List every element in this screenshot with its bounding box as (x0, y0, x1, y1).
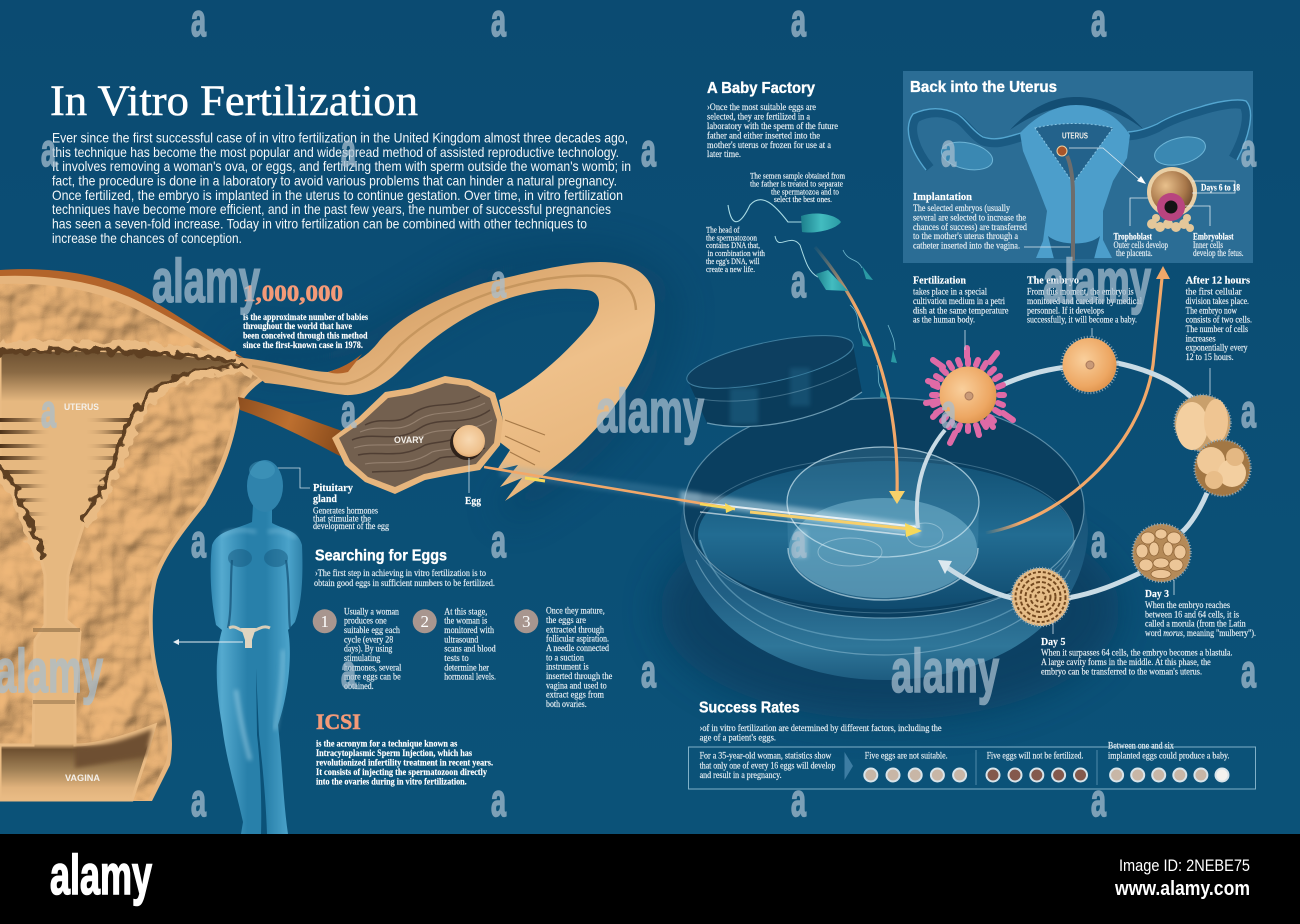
implantation text: The selected embryos (usually (913, 203, 1010, 214)
step 1: produces one (344, 617, 387, 627)
illustration: uterus cross-section (0, 269, 270, 801)
after 12 hours text: division takes place. (1186, 297, 1249, 307)
implantation text: to the mother's uterus through a (913, 232, 1019, 242)
cell development ring (917, 363, 1207, 598)
cell: morula, day 3 (1132, 524, 1190, 582)
egg in ovary (450, 425, 485, 460)
implantation text (913, 191, 1027, 252)
fertilization text (913, 274, 1008, 326)
footer bar: www.alamy.com (1114, 878, 1250, 900)
success rates box: implanted eggs could produce a baby. (1108, 752, 1230, 762)
embryoblast label: Embryoblast (1193, 232, 1234, 242)
watermarks: a (1241, 124, 1256, 176)
step 2: determine her (444, 663, 490, 673)
semen sample note: select the best ones. (774, 195, 832, 204)
cell: two-cell stage (1174, 395, 1230, 451)
implantation text: Implantation (913, 191, 972, 203)
embryo text: The embryo (1027, 274, 1079, 286)
spermatozoon note (706, 226, 766, 274)
embryo text: successfully, it will become a baby. (1027, 315, 1137, 326)
sperm illustrations (728, 200, 897, 398)
intro text: It involves removing a woman's ova, or eggs, and fertilizing them with sperm outside the woman's womb; in (52, 158, 631, 174)
callout: ICSI: It consists of injecting the spermatozoon directly (316, 768, 487, 778)
watermarks: alamy (1043, 247, 1151, 315)
step 2: hormonal levels. (444, 673, 496, 683)
watermarks: alamy (596, 377, 704, 445)
pituitary gland label: gland (313, 493, 337, 505)
step 1: Usually a woman (344, 607, 399, 617)
after 12 hours text: The embryo now (1186, 306, 1237, 316)
watermarks: a (341, 124, 356, 176)
fertilization text: as the human body. (913, 316, 975, 326)
fertilization text: Fertilization (913, 274, 966, 286)
section: success rates: Success Rates (699, 700, 800, 716)
watermarks: a (941, 385, 956, 437)
implanted eggs (1110, 768, 1228, 782)
title: In Vitro Fertilization (50, 78, 418, 125)
callout: 1,000,000: since the first-known case in 1978. (243, 341, 363, 351)
section: searching for eggs: ›The first step in achieving in vitro fertilization is to (315, 568, 486, 579)
step 2: the woman is (444, 617, 488, 627)
after 12 hours text: exponentially every (1186, 344, 1248, 354)
success rates box: that only one of every 16 eggs will develop (700, 760, 836, 771)
trophoblast label: the placenta. (1116, 249, 1152, 259)
cell: fertilization (926, 348, 1013, 443)
success rates box (688, 742, 1256, 789)
fertilization text: cultivation medium in a petri (913, 297, 1005, 307)
intro text: increase the chances of conception. (52, 230, 242, 246)
after 12 hours text: The number of cells (1186, 324, 1248, 335)
day 3 text (1145, 588, 1256, 639)
section: searching for eggs (313, 548, 612, 710)
after 12 hours text (1186, 274, 1252, 363)
callout: 1,000,000: been conceived through this method (243, 332, 368, 342)
dish lid (683, 325, 862, 427)
callout: ICSI (316, 709, 493, 788)
watermarks: a (641, 124, 656, 176)
day 5 text: When it surpasses 64 cells, the embryo becomes a blastula. (1041, 649, 1232, 659)
section: a baby factory: A Baby Factory (707, 80, 815, 97)
step 3: 3 (522, 612, 531, 631)
after 12 hours text: consists of two cells. (1186, 315, 1252, 326)
callout: ICSI: revolutionized infertility treatment in recent years. (316, 758, 493, 768)
section: a baby factory: ›Once the most suitable eggs are (707, 103, 816, 113)
step 3: instrument is (546, 663, 589, 673)
watermarks: a (341, 385, 356, 437)
section: a baby factory (707, 80, 838, 160)
watermarks: a (941, 124, 956, 176)
after 12 hours text: 12 to 15 hours. (1186, 353, 1234, 363)
day 3 text: word morus, meaning "mulberry"). (1145, 628, 1256, 639)
illustration: petri dish (680, 325, 1088, 680)
icon: woman figure (173, 460, 302, 834)
pituitary gland label: Generates hormones (313, 506, 378, 516)
step 2: ultrasound (444, 635, 479, 645)
callout: 1,000,000: is the approximate number of babies (243, 313, 368, 323)
anatomy labels: UTERUS (64, 402, 99, 412)
watermarks: a (791, 774, 806, 826)
day 5 text: Day 5 (1041, 636, 1066, 648)
step 1: more eggs can be (344, 673, 401, 683)
day 5 text: A large cavity forms in the middle. At this phase, the (1041, 657, 1211, 668)
trophoblast label: Trophoblast (1114, 232, 1153, 242)
intro text: techniques have become more efficient, and in the past few years, the number of successful pregnancies (52, 201, 611, 217)
spermatozoon note: the egg's DNA, will (706, 257, 760, 266)
spermatozoon note: contains DNA that, (706, 241, 760, 250)
step 3: extracted through (546, 625, 604, 635)
day 3 text: called a morula (from the Latin (1145, 619, 1246, 630)
semen sample note: The semen sample obtained from (750, 172, 845, 180)
heading: Back into the Uterus (910, 79, 1057, 96)
step 1 (313, 607, 402, 692)
implantation text: catheter inserted into the vagina. (913, 242, 1020, 252)
after 12 hours text: the first cellular (1186, 287, 1242, 298)
watermarks: a (1241, 645, 1256, 697)
uterus diagram (908, 97, 1251, 261)
pituitary gland label: Pituitary (313, 482, 353, 494)
callout: ICSI: into the ovaries during in vitro fertilization. (316, 778, 467, 788)
intro text: has seen a seven-fold increase. Today in vitro fertilization can be combined with other techniques to (52, 216, 587, 232)
step 1: suitable egg each (344, 626, 400, 636)
panel: back into the uterus: UTERUS (1062, 132, 1089, 140)
watermarks: a (791, 515, 806, 567)
embryoblast label (1193, 232, 1244, 259)
step 3: inserted through the (546, 672, 612, 682)
watermarks: alamy (0, 637, 103, 705)
watermarks: a (1091, 774, 1106, 826)
step 3 (514, 607, 612, 710)
watermarks: a (1091, 515, 1106, 567)
embryo text: personnel. If it develops (1027, 305, 1104, 316)
step 1: days). By using (344, 644, 393, 655)
step 3: extract eggs from (546, 690, 605, 701)
fertilization text: dish at the same temperature (913, 306, 1008, 316)
section: searching for eggs: obtain good eggs in sufficient numbers to be fertilized. (314, 578, 495, 589)
arrows over the dish (484, 247, 1170, 537)
intro text: this technique has become the most popular and widespread method of assisted reproductive technology. (52, 144, 619, 160)
step 1: stimulating (344, 654, 381, 664)
watermarks: a (41, 124, 56, 176)
watermarks: a (191, 774, 206, 826)
spermatozoon note: in combination with (708, 249, 766, 258)
section: success rates: age of a patient's eggs. (700, 733, 776, 744)
cell: blastula, day 5 (1012, 568, 1070, 626)
spermatozoon note: the spermatozoon (706, 234, 758, 242)
unsuitable eggs (864, 768, 966, 782)
anatomy labels: OVARY (394, 435, 424, 445)
section: a baby factory: mother's uterus or frozen for use at a (707, 140, 832, 151)
footer bar: Image ID: 2NEBE75 (1119, 856, 1250, 875)
watermarks: alamy (891, 637, 999, 705)
step 3: to a suction (546, 653, 584, 663)
watermarks: a (791, 255, 806, 307)
step 1: cycle (every 28 (344, 634, 394, 645)
fertilization text: takes place in a special (913, 288, 987, 298)
intro text: fact, the procedure is done in a laboratory to avoid various problems that can hinder a natural pregnancy. (52, 172, 617, 188)
intro text (52, 130, 631, 246)
section: a baby factory: later time. (707, 150, 741, 160)
step 3: the eggs are (546, 616, 586, 626)
watermarks: a (1241, 385, 1256, 437)
embryo text: From this moment, the embryo is (1027, 288, 1134, 298)
spermatozoon note: The head of (706, 226, 740, 234)
pituitary gland label: development of the egg (313, 521, 389, 532)
cell: four-cell stage (1194, 440, 1250, 496)
intro text: Ever since the first successful case of in vitro fertilization in the United Kingdom almost three decades ago, (52, 130, 628, 146)
day 5 text (1041, 636, 1232, 677)
pituitary gland label: that stimulate the (313, 514, 371, 524)
footer bar (0, 834, 1300, 924)
after 12 hours text: After 12 hours (1186, 274, 1251, 286)
semen sample note: the spermatozoa and to (771, 188, 839, 196)
callout: 1,000,000: 1,000,000 (243, 281, 343, 306)
callout: ICSI: ICSI (316, 709, 361, 734)
watermarks: alamy (152, 247, 260, 315)
step 2: scans and blood (444, 645, 496, 655)
section: success rates: ›of in vitro fertilization are determined by different factors, including the (700, 723, 942, 734)
watermarks: a (491, 774, 506, 826)
section: a baby factory: father and either inserted into the (707, 130, 820, 142)
semen sample note (750, 172, 845, 204)
step 1: hormones, several (344, 663, 402, 673)
watermarks: a (341, 645, 356, 697)
step 3: vagina and used to (546, 681, 607, 691)
callout: ICSI: Intracytoplasmic Sperm Injection, which has (316, 749, 472, 759)
section: a baby factory: laboratory with the sperm of the future (707, 121, 838, 132)
anatomy labels (64, 402, 481, 783)
step 3: Once they mature, (546, 607, 605, 617)
step 2: tests to (444, 654, 469, 664)
trophoblast label: Outer cells develop (1114, 241, 1168, 251)
watermarks: a (41, 385, 56, 437)
inner dish (787, 447, 979, 600)
section: searching for eggs: Searching for Eggs (315, 548, 447, 564)
day 3 text: Day 3 (1145, 588, 1169, 600)
step 1: 1 (320, 612, 329, 631)
embryo text (1027, 274, 1142, 326)
illustration: transfer beams (500, 470, 920, 535)
semen sample note: the father is treated to separate (750, 180, 843, 188)
section: success rates (688, 700, 1256, 789)
step 2: monitored with (444, 626, 494, 636)
day 3 text: When the embryo reaches (1145, 601, 1230, 611)
spermatozoon note: create a new life. (706, 265, 755, 274)
anatomy labels: Egg (465, 495, 481, 507)
mini uterus in figure (229, 627, 270, 648)
leader lines (271, 328, 1210, 634)
step 3: follicular aspiration. (546, 634, 609, 645)
step 1: obtained. (344, 682, 374, 692)
embryoblast label: develop the fetus. (1193, 248, 1244, 259)
unfertilized eggs (986, 768, 1087, 782)
watermarks: a (491, 255, 506, 307)
implantation text: chances of success) are transferred (913, 222, 1027, 233)
embryo text: monitored and cared for by medical (1027, 296, 1142, 307)
embryoblast label: Inner cells (1193, 241, 1223, 251)
callout: 1,000,000 (243, 281, 368, 351)
panel: back into the uterus: Days 6 to 18 (1201, 184, 1240, 194)
illustration: ovarian ligament (238, 397, 345, 456)
watermarks: a (491, 515, 506, 567)
illustration: ovary (332, 376, 503, 494)
uterus cavity (0, 350, 265, 800)
trophoblast label (1114, 232, 1168, 259)
step 2: 2 (420, 612, 429, 631)
panel: back into the uterus (903, 71, 1253, 263)
cell: embryo (1062, 337, 1118, 393)
step 2 (413, 607, 496, 683)
callout: ICSI: is the acronym for a technique known as (316, 739, 458, 749)
success rates box: For a 35-year-old woman, statistics show (700, 752, 831, 762)
implantation text: several are selected to increase the (913, 214, 1026, 224)
day 3 text: between 16 and 64 cells, it is (1145, 610, 1239, 620)
step 3: both ovaries. (546, 700, 587, 710)
intro text: Once fertilized, the embryo is implanted in the uterus to continue gestation. Over time, in vitro fertilization (52, 187, 623, 203)
pituitary gland label (313, 482, 389, 532)
step 2: At this stage, (444, 607, 487, 617)
watermarks: a (641, 645, 656, 697)
footer bar: alamy (50, 843, 152, 906)
section: a baby factory: selected, they are fertilized in a (707, 112, 811, 122)
success rates box: Five eggs will not be fertilized. (987, 751, 1084, 762)
after 12 hours text: increases (1186, 334, 1216, 344)
success rates box: Five eggs are not suitable. (865, 752, 948, 762)
anatomy labels: VAGINA (65, 773, 101, 783)
watermarks: a (191, 515, 206, 567)
day 5 text: embryo can be transferred to the woman's uterus. (1041, 666, 1202, 677)
blastocyst (1147, 167, 1197, 232)
success rates box: Between one and six (1108, 742, 1174, 752)
callout: 1,000,000: throughout the world that have (243, 322, 352, 332)
step 3: A needle connected (546, 644, 609, 654)
success rates box: and result in a pregnancy. (700, 771, 782, 781)
illustration: fallopian tube and fimbria (236, 262, 655, 501)
